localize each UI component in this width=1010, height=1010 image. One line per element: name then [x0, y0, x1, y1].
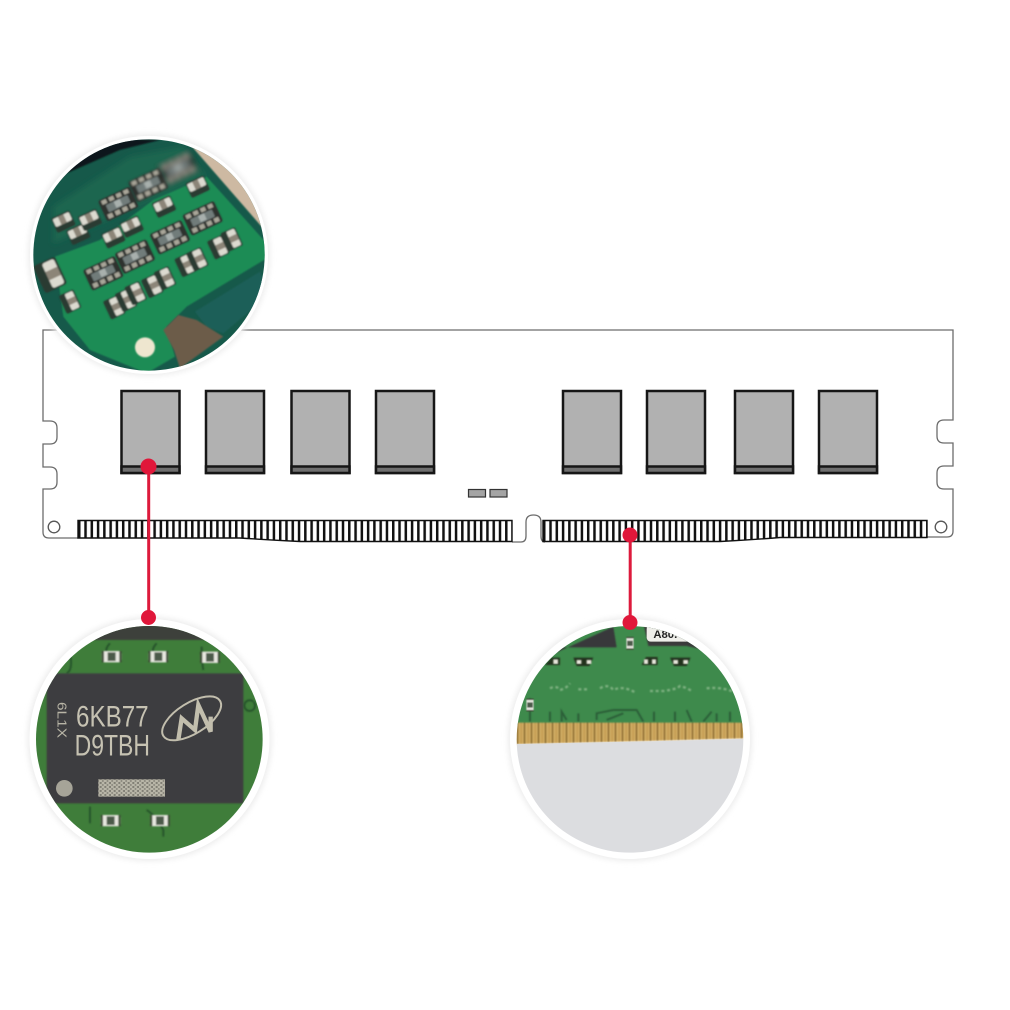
chip package	[47, 673, 243, 803]
gray background	[516, 739, 744, 853]
callout line: pins to magnifier 3	[629, 535, 632, 623]
plated hole	[135, 337, 155, 357]
chip 8	[819, 391, 877, 473]
mounting hole: right	[935, 521, 947, 533]
small components	[468, 490, 507, 497]
chip side marking: 6L1X	[54, 702, 69, 738]
chip 5	[563, 391, 621, 473]
callout dot: chip	[140, 458, 156, 474]
blurred upper board	[53, 147, 207, 243]
chip 1	[122, 391, 180, 473]
dark top edge	[61, 139, 160, 180]
chip 3	[292, 391, 350, 473]
magnifier 2: memory chip photo	[20, 610, 280, 861]
callout dot: magnifier 2	[141, 610, 156, 625]
magnifier 3: gold contact edge photo	[500, 610, 760, 863]
callout dot: magnifier 3	[622, 615, 638, 630]
gold fingers	[510, 723, 750, 744]
label on chip	[646, 628, 688, 642]
module outline	[43, 330, 953, 542]
chip 7	[735, 391, 793, 473]
callout line: chip to magnifier 2	[147, 467, 150, 618]
diagram: memory module with magnified details	[27, 134, 954, 862]
trace patterns	[550, 683, 733, 693]
data matrix code	[98, 779, 165, 797]
bottom brown	[163, 315, 223, 368]
pin one marker	[56, 780, 73, 797]
chip 2	[206, 391, 264, 473]
contact pins: left bank	[78, 520, 512, 542]
chip 6	[647, 391, 705, 473]
chip label text: A80.	[653, 629, 677, 641]
memory chips row	[122, 391, 877, 473]
chip marking line 1: 6KB77	[76, 700, 149, 733]
beige background of board	[192, 148, 261, 228]
dark teal tab	[195, 272, 267, 333]
dark chips at top	[556, 627, 618, 654]
bright board	[55, 177, 267, 373]
magnifier 1: surface mount components photo	[20, 130, 280, 380]
chip marking line 2: D9TBH	[75, 729, 150, 762]
top chip edge	[94, 626, 205, 641]
mounting hole: left	[48, 521, 60, 533]
callout dot: pins	[622, 528, 638, 542]
manufacturer logo	[161, 695, 222, 742]
board	[517, 626, 742, 727]
contact pins: right bank	[543, 520, 927, 542]
chip 4	[376, 391, 434, 473]
